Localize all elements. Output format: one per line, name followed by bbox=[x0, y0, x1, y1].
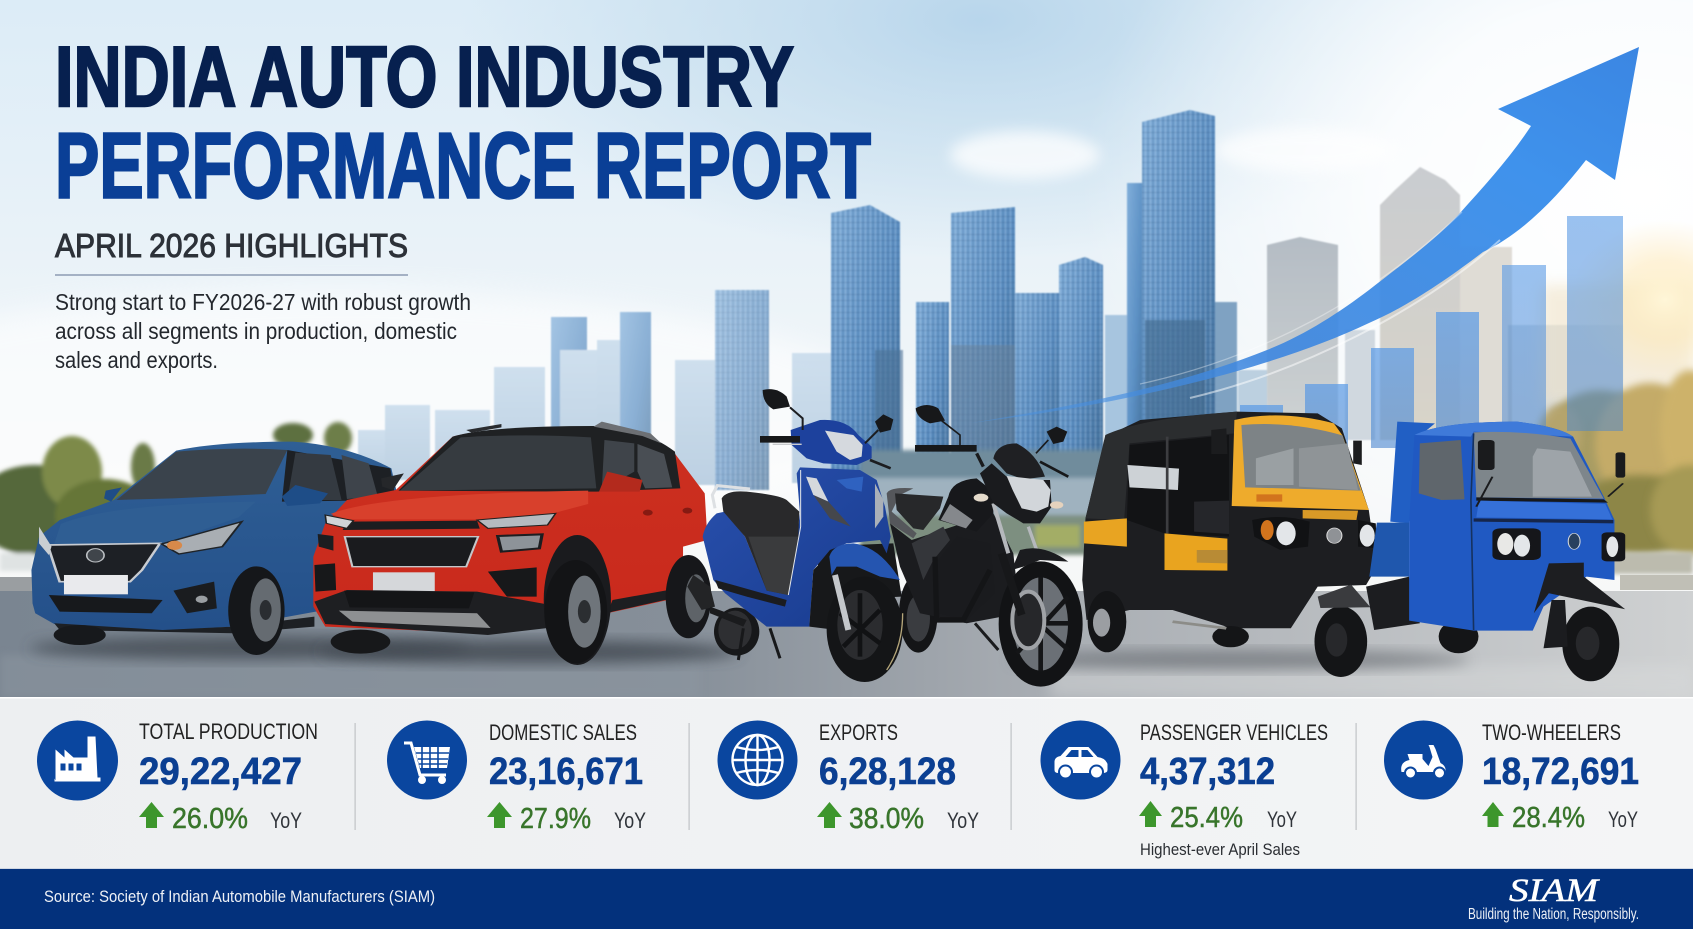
vehicle: blue three-wheeler cargo truck bbox=[1366, 422, 1625, 681]
label: DOMESTIC SALES bbox=[489, 720, 637, 745]
percent change: 27.9% bbox=[520, 803, 591, 835]
background skyline: main glass towers bbox=[831, 110, 1268, 492]
vehicle: blue hatchback bbox=[31, 442, 398, 655]
vehicle: red SUV bbox=[313, 422, 711, 665]
title bbox=[55, 30, 871, 218]
percent change: 26.0% bbox=[172, 803, 248, 835]
YoY tag: YoY bbox=[614, 808, 646, 833]
icon: scooter bbox=[1384, 720, 1463, 800]
SIAM tagline: Building the Nation, Responsibly. bbox=[1468, 906, 1639, 923]
value: 4,37,312 bbox=[1140, 751, 1275, 793]
vehicle: yellow and black auto rickshaw bbox=[1082, 412, 1377, 677]
YoY tag: YoY bbox=[270, 808, 302, 833]
arrow: rising growth arrow bbox=[971, 47, 1639, 423]
intro paragraph: Strong start to FY2026-27 with robust growth bbox=[55, 289, 471, 315]
intro paragraph: sales and exports. bbox=[55, 347, 218, 373]
growth arrow bbox=[817, 802, 842, 828]
icon: factory bbox=[37, 720, 118, 800]
value: 23,16,671 bbox=[489, 751, 643, 793]
growth arrow bbox=[139, 802, 164, 828]
YoY tag: YoY bbox=[1267, 807, 1297, 832]
label: TWO-WHEELERS bbox=[1482, 720, 1621, 745]
note: Highest-ever April Sales bbox=[1140, 840, 1300, 859]
label: TOTAL PRODUCTION bbox=[139, 719, 318, 744]
background skyline: distant left towers bbox=[358, 290, 832, 490]
subtitle: APRIL 2026 HIGHLIGHTS bbox=[55, 227, 408, 264]
value: 6,28,128 bbox=[819, 751, 956, 793]
KPI: passenger vehicles bbox=[1040, 720, 1328, 859]
YoY tag: YoY bbox=[947, 808, 979, 833]
KPI panel bbox=[0, 697, 1693, 868]
value: 18,72,691 bbox=[1482, 751, 1639, 793]
background: bridge and hedge behind two-wheelers bbox=[860, 450, 1693, 574]
percent change: 38.0% bbox=[849, 803, 924, 835]
title line one: INDIA AUTO INDUSTRY bbox=[55, 30, 794, 125]
SIAM logo wordmark: SIAM bbox=[1509, 873, 1600, 909]
right side sun glow and trees bbox=[1535, 220, 1693, 555]
vehicle: black motorcycle bbox=[887, 405, 1083, 687]
background skyline: grey and beige towers bbox=[1267, 167, 1623, 447]
icon: globe bbox=[718, 720, 798, 800]
label: EXPORTS bbox=[819, 720, 898, 745]
title line two: PERFORMANCE REPORT bbox=[55, 114, 871, 218]
icon: shopping cart bbox=[387, 720, 467, 800]
percent change: 28.4% bbox=[1512, 802, 1585, 834]
intro paragraph: across all segments in production, domestic bbox=[55, 318, 457, 344]
source note: Source: Society of Indian Automobile Manufacturers (SIAM) bbox=[44, 887, 435, 906]
hero background: sky bbox=[0, 0, 1693, 700]
YoY tag: YoY bbox=[1608, 807, 1638, 832]
KPI: total production bbox=[37, 719, 318, 835]
growth arrow bbox=[1482, 802, 1504, 827]
ground: road and kerb bbox=[0, 575, 1693, 698]
KPI: domestic sales bbox=[387, 720, 646, 835]
label: PASSENGER VEHICLES bbox=[1140, 720, 1328, 745]
vehicle: blue scooter bbox=[687, 389, 903, 682]
icon: car bbox=[1040, 720, 1120, 800]
background: trees left bbox=[0, 422, 352, 571]
intro paragraph bbox=[55, 289, 471, 373]
KPI: two-wheelers bbox=[1384, 720, 1639, 834]
percent change: 25.4% bbox=[1170, 802, 1243, 834]
footer band bbox=[0, 868, 1693, 929]
value: 29,22,427 bbox=[139, 751, 302, 793]
chart: translucent growth bars bbox=[1240, 216, 1623, 454]
growth arrow bbox=[487, 802, 512, 828]
KPI: exports bbox=[718, 720, 979, 835]
growth arrow bbox=[1139, 801, 1162, 827]
